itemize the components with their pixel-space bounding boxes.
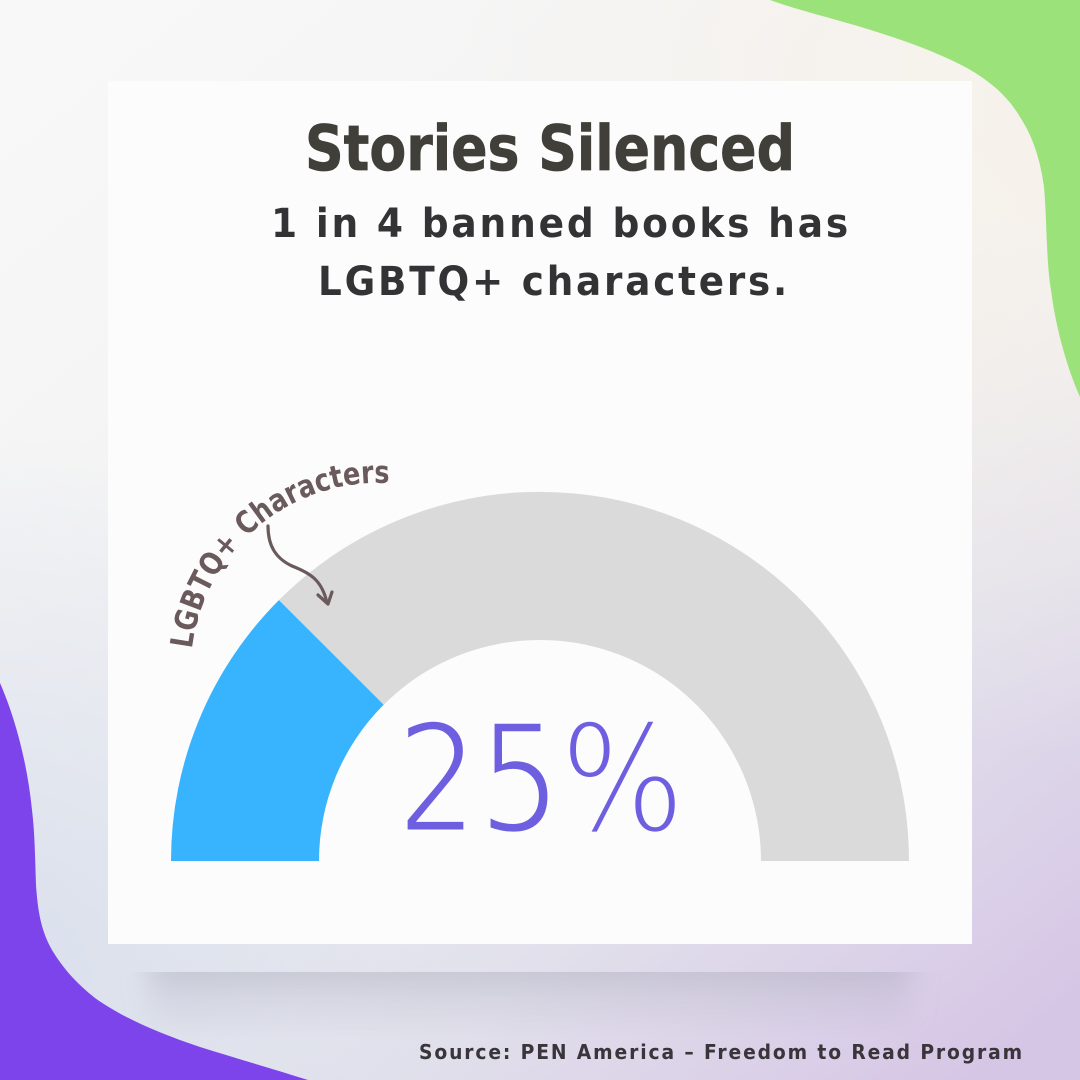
title: Stories Silenced xyxy=(305,112,795,185)
subtitle xyxy=(271,201,851,305)
green corner blob xyxy=(770,0,1080,397)
gauge value: blue arc 25% xyxy=(171,600,384,861)
gauge remainder: grey arc xyxy=(279,492,909,861)
source note: Source: PEN America – Freedom to Read Program xyxy=(419,1040,1024,1064)
white card panel xyxy=(108,81,972,944)
percentage value: 25% xyxy=(396,691,684,868)
subtitle: 1 in 4 banned books has xyxy=(271,201,851,247)
gauge chart xyxy=(171,492,909,861)
purple corner blob xyxy=(0,683,308,1080)
subtitle: LGBTQ+ characters. xyxy=(318,259,790,305)
card shadow xyxy=(144,972,914,1010)
curved label: LGBTQ+ Characters: LGBTQ+ Characters xyxy=(170,466,388,647)
icon: curved arrow to grey arc xyxy=(268,526,332,604)
